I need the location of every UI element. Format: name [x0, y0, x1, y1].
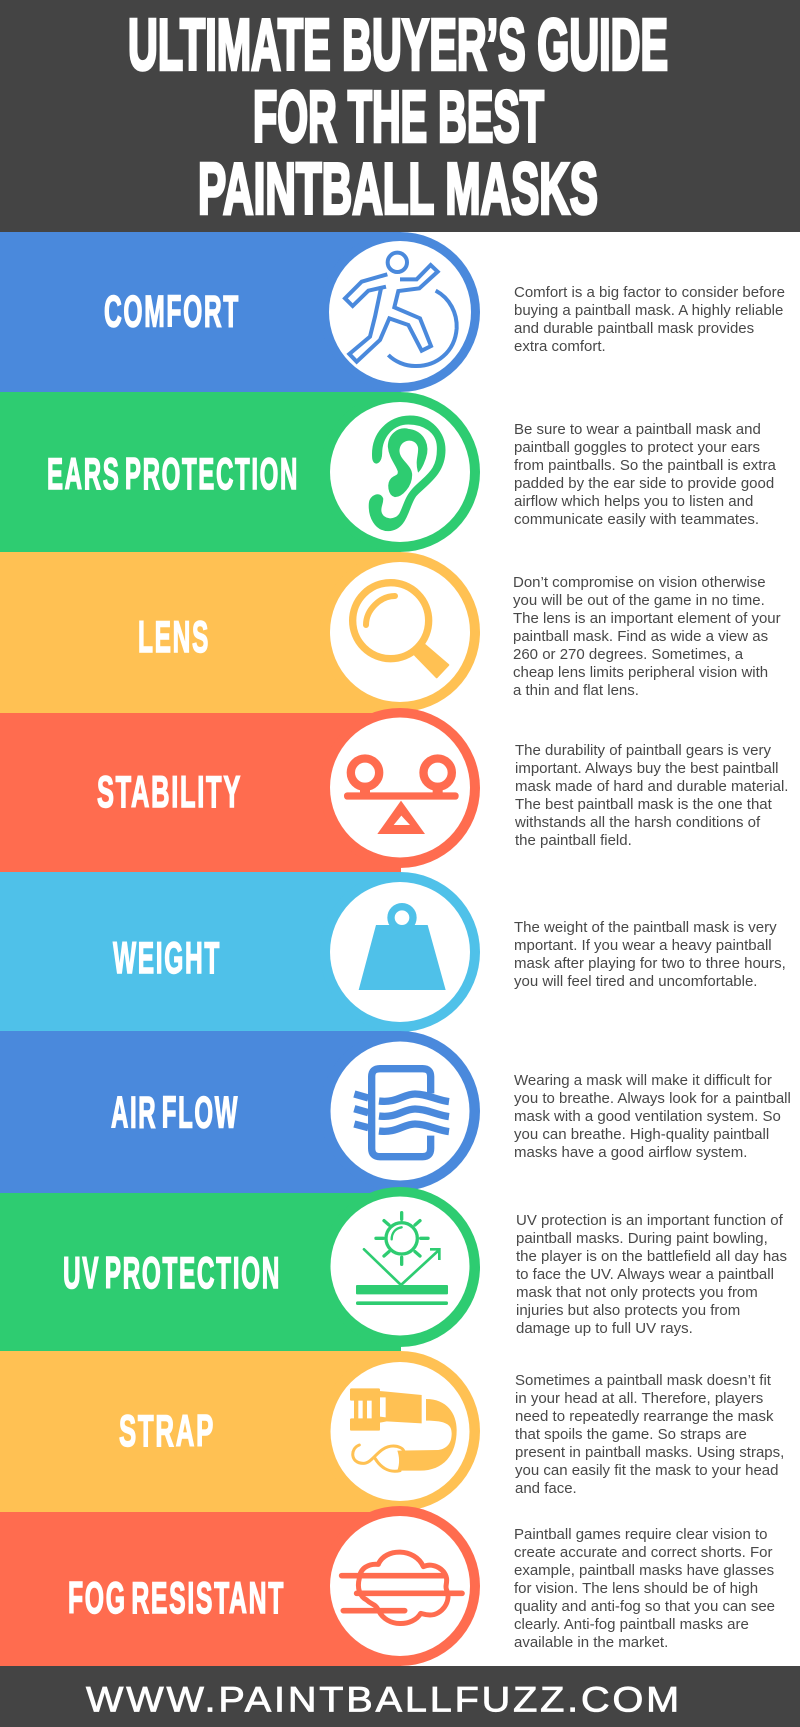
title: FOR THE BEST: [253, 77, 544, 157]
text: air flow: you to breathe. Always look for a paintball: [514, 1090, 791, 1107]
text: stability: important. Always buy the best paintball: [515, 760, 778, 777]
text: ears protection: padded by the ear side to provide good: [514, 475, 774, 492]
row: strap: [0, 1351, 784, 1512]
text: strap: in your head at all. Therefore, players: [515, 1390, 763, 1407]
text: lens: cheap lens limits peripheral vision with: [513, 664, 768, 681]
text: fog resistant: available in the market.: [514, 1634, 668, 1651]
text: uv protection: mask that not only protects you from: [516, 1284, 758, 1301]
icon: fog cloud: [342, 1552, 462, 1624]
heading: strap: STRAP: [119, 1407, 215, 1456]
text: uv protection: paintball masks. During paint bowling,: [516, 1230, 768, 1247]
text: air flow: mask with a good ventilation system. So: [514, 1108, 781, 1125]
text: strap: present in paintball masks. Using straps,: [515, 1444, 784, 1461]
icon: magnifying glass: [353, 583, 448, 677]
text: ears protection: communicate easily with teammates.: [514, 511, 759, 528]
row: air flow: [0, 1031, 791, 1193]
icon: air filter: [354, 1069, 449, 1157]
icon: running person: [345, 253, 457, 366]
heading: fog resistant: FOG RESISTANT: [68, 1574, 285, 1623]
row: weight: [0, 872, 786, 1032]
heading: stability: STABILITY: [97, 768, 242, 817]
text: strap: and face.: [515, 1480, 577, 1497]
text: comfort: Comfort is a big factor to consider before: [514, 284, 785, 301]
text: lens: The lens is an important element of your: [513, 610, 781, 627]
text: ears protection: from paintballs. So the paintball is extra: [514, 457, 776, 474]
heading: air flow: AIR FLOW: [111, 1088, 239, 1138]
heading: weight: WEIGHT: [113, 934, 221, 983]
text: air flow: masks have a good airflow system.: [514, 1144, 747, 1161]
row: ears protection: [0, 392, 776, 552]
text: strap: need to repeatedly rearrange the mask: [515, 1408, 774, 1425]
header banner: [0, 0, 800, 232]
icon: balance scale: [344, 758, 459, 834]
text: lens: paintball mask. Find as wide a view as: [513, 628, 768, 645]
heading: comfort: COMFORT: [104, 288, 240, 336]
text: stability: The best paintball mask is the one that: [515, 796, 773, 813]
row: uv protection: [0, 1187, 787, 1351]
text: lens: Don’t compromise on vision otherwise: [513, 574, 766, 591]
text: strap: that spoils the game. So straps are: [515, 1426, 747, 1443]
text: ears protection: Be sure to wear a paintball mask and: [514, 421, 761, 438]
text: fog resistant: Paintball games require clear vision to: [514, 1526, 767, 1543]
text: air flow: Wearing a mask will make it difficult for: [514, 1072, 772, 1089]
text: uv protection: the player is on the battlefield all day has: [516, 1248, 787, 1265]
icon: strap buckle: [350, 1388, 457, 1471]
text: stability: The durability of paintball gears is very: [515, 742, 771, 759]
text: ears protection: paintball goggles to protect your ears: [514, 439, 760, 456]
text: stability: mask made of hard and durable material.: [515, 778, 788, 795]
row: stability: [0, 708, 788, 872]
text: weight: mask after playing for two to three hours,: [514, 955, 786, 972]
icon: weight: [359, 907, 446, 990]
text: weight: you will feel tired and uncomfortable.: [514, 973, 757, 990]
text: stability: withstands all the harsh conditions of: [514, 814, 761, 831]
title: [128, 5, 668, 229]
text: fog resistant: example, paintball masks have glasses: [514, 1562, 774, 1579]
text: strap: Sometimes a paintball mask doesn’t fit: [515, 1372, 772, 1389]
text: fog resistant: clearly. Anti-fog paintball masks are: [514, 1616, 749, 1633]
footer website url: WWW.PAINTBALLFUZZ.COM: [86, 1681, 682, 1720]
heading: uv protection: UV PROTECTION: [63, 1249, 281, 1298]
text: weight: mportant. If you wear a heavy paintball: [514, 937, 772, 954]
text: uv protection: damage up to full UV rays.: [516, 1320, 693, 1337]
text: weight: The weight of the paintball mask is very: [514, 919, 777, 936]
icon: ear: [369, 416, 445, 531]
footer banner: [0, 1666, 800, 1727]
text: ears protection: airflow which helps you to listen and: [514, 493, 753, 510]
text: lens: a thin and flat lens.: [513, 682, 639, 699]
row: comfort: [0, 232, 785, 392]
text: uv protection: injuries but also protects you from: [516, 1302, 740, 1319]
row: lens: [0, 552, 781, 713]
text: uv protection: UV protection is an important function of: [516, 1212, 784, 1229]
text: strap: you can easily fit the mask to your head: [515, 1462, 778, 1479]
text: comfort: extra comfort.: [514, 338, 606, 355]
heading: lens: LENS: [138, 613, 210, 662]
heading: ears protection: EARS PROTECTION: [47, 450, 299, 499]
text: fog resistant: quality and anti-fog so that you can see: [514, 1598, 775, 1615]
text: lens: you will be out of the game in no time.: [513, 592, 765, 609]
text: fog resistant: create accurate and correct shorts. For: [514, 1544, 772, 1561]
row: fog resistant: [0, 1506, 775, 1666]
icon: uv reflection: [356, 1213, 448, 1305]
text: comfort: and durable paintball mask provides: [514, 320, 754, 337]
text: comfort: buying a paintball mask. A highly reliable: [514, 302, 783, 319]
text: lens: 260 or 270 degrees. Sometimes, a: [513, 646, 744, 663]
text: uv protection: to face the UV. Always wear a paintball: [516, 1266, 774, 1283]
text: air flow: you can breathe. High-quality paintball: [514, 1126, 769, 1143]
text: stability: the paintball field.: [515, 832, 632, 849]
text: fog resistant: for vision. The lens should be of high: [514, 1580, 758, 1597]
